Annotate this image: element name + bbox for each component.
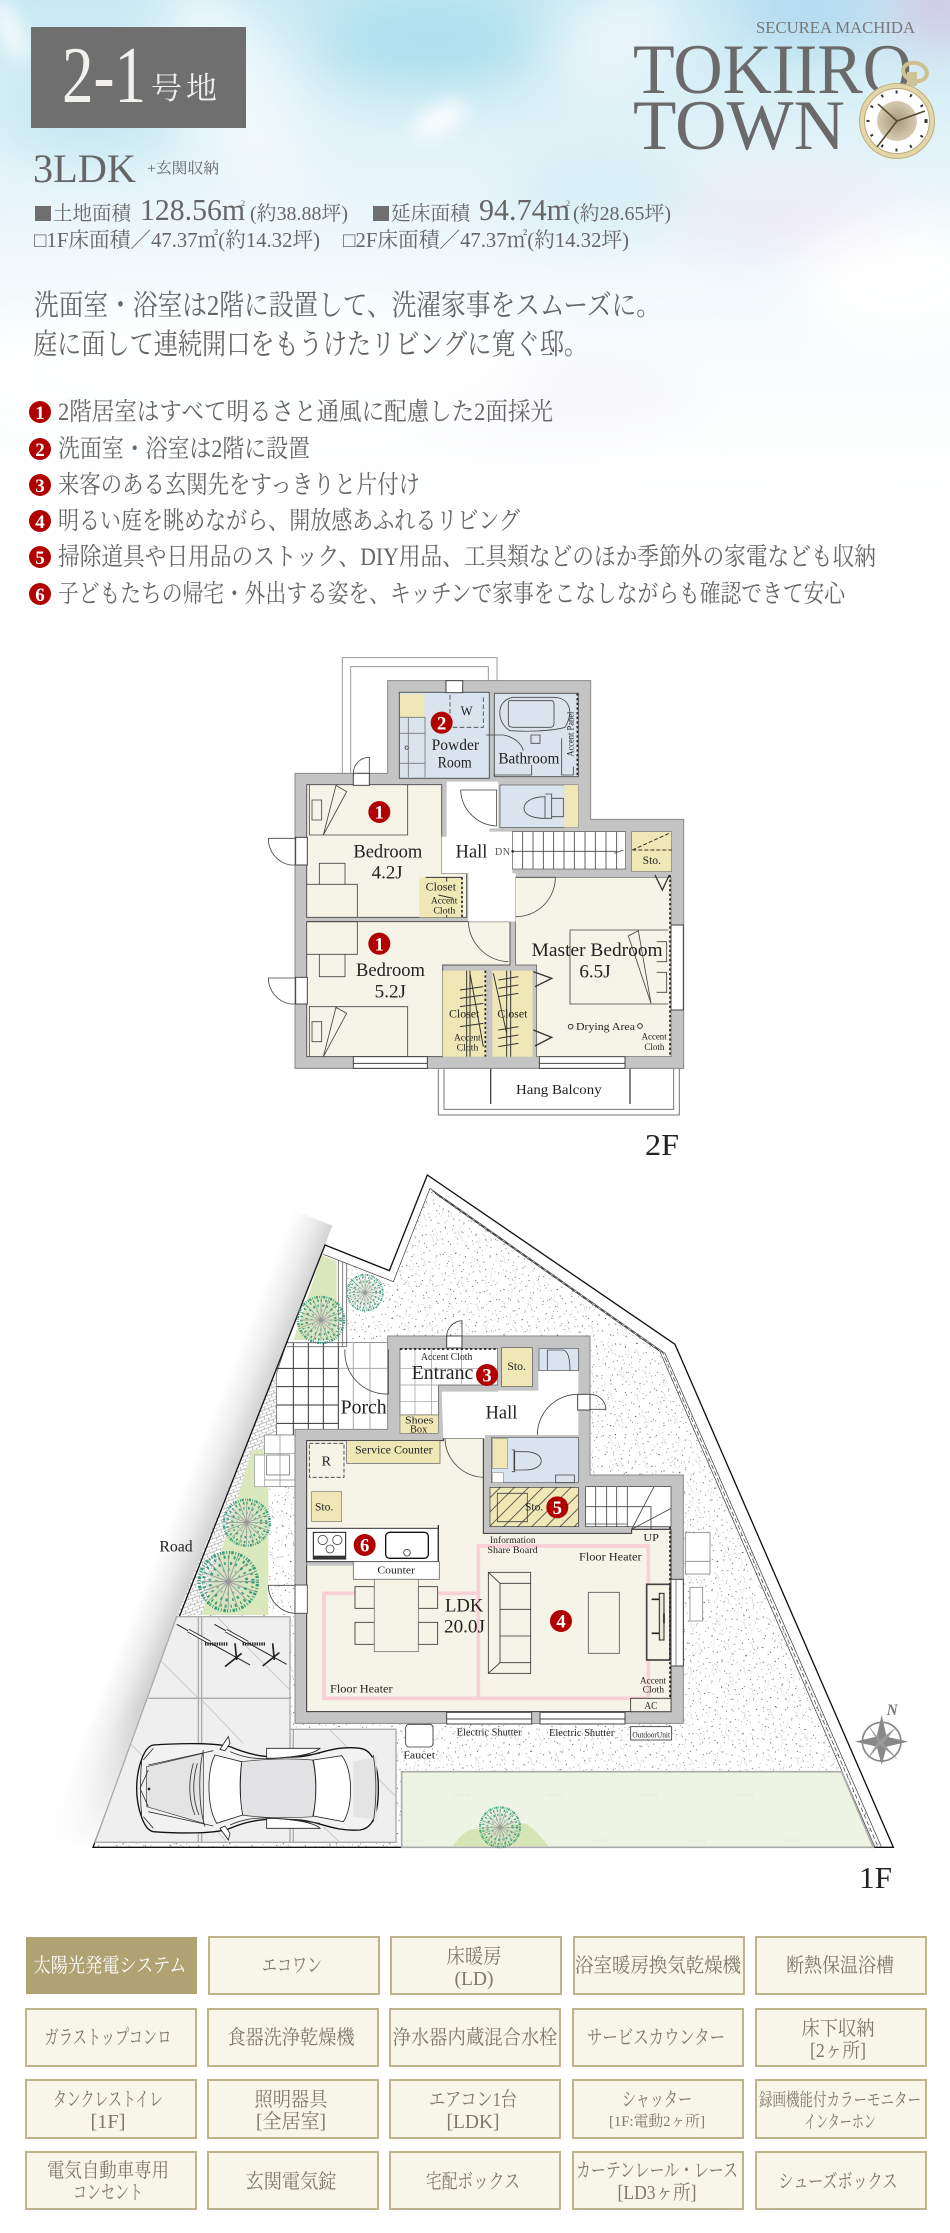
room labels: W — [461, 705, 473, 720]
stairs — [495, 832, 623, 869]
toilet fixtures — [497, 1350, 574, 1522]
windows and doors — [268, 681, 683, 1068]
room labels: Accent — [642, 1031, 667, 1041]
closets: Accent — [454, 1034, 481, 1044]
row 2: 浄水器内蔵混合水栓 — [392, 2026, 558, 2049]
row 3: [1F:電動2ヶ所] — [609, 2113, 705, 2130]
room floors — [307, 1348, 671, 1712]
room labels: Cloth — [643, 1686, 664, 1696]
area specifications: 土地面積 — [53, 202, 133, 225]
bath fixtures — [400, 695, 573, 818]
row 1: 断熱保温浴槽 — [786, 1954, 894, 1977]
icon: pocket watch — [860, 60, 934, 159]
marker 1: 1 — [375, 803, 384, 824]
planter divider — [287, 1260, 347, 1347]
room labels: Sto. — [643, 855, 661, 867]
gravel ground — [95, 1188, 882, 1847]
exterior units — [406, 1533, 710, 1747]
room labels: Accent Panel — [566, 711, 576, 757]
closets — [426, 693, 670, 1057]
room labels — [353, 705, 667, 1052]
area specifications: (約38.88坪) — [250, 202, 348, 225]
terrace outline — [342, 658, 497, 773]
row 4: コンセント — [73, 2182, 143, 2204]
icon: compass — [855, 1702, 908, 1765]
floor plan: 1F — [20, 1175, 908, 1850]
row 4: カーテンレール・レース — [576, 2160, 738, 2182]
site boundary — [93, 1175, 893, 1847]
room labels: Drying Area — [576, 1022, 635, 1033]
carport paving — [95, 1617, 396, 1842]
marker 5 — [546, 1496, 568, 1519]
feature list: 2 — [35, 440, 45, 461]
heading: plan type: 3LDK — [33, 146, 136, 191]
room labels: Bedroom — [353, 841, 422, 862]
room labels: Entranc — [412, 1362, 473, 1384]
row 3: シャッター — [622, 2089, 692, 2111]
room labels: Bathroom — [498, 750, 559, 767]
room labels: Information — [490, 1535, 536, 1546]
hang balcony: Hang Balcony — [516, 1082, 602, 1097]
area specifications — [34, 192, 671, 252]
room labels: Bedroom — [356, 960, 425, 981]
room labels: 20.0J — [444, 1617, 485, 1638]
room labels: Porch — [341, 1396, 387, 1418]
feature list: 5 — [35, 548, 45, 569]
row 4: [LD3ヶ所] — [618, 2181, 696, 2204]
feature list: 洗面室・浴室は2階に設置 — [58, 435, 310, 463]
row 2: 食器洗浄乾燥機 — [228, 2026, 355, 2049]
closets: Cloth — [433, 906, 456, 916]
row 1: (LD) — [454, 1968, 494, 1990]
room labels: AC — [644, 1701, 658, 1712]
row 3: インターホン — [804, 2112, 876, 2132]
marker 1 — [368, 801, 390, 824]
marker 5: 5 — [553, 1498, 562, 1519]
wall units: windows and doors — [268, 1321, 683, 1724]
logo: TOKIIRO TOWN: TOKIIRO — [633, 31, 912, 109]
area specifications: □1F床面積／47.37㎡(約14.32坪) — [34, 228, 320, 252]
marker 1 second bedroom — [368, 933, 390, 955]
area specifications: 2 — [241, 199, 245, 208]
marker 3 — [476, 1364, 498, 1387]
lawn — [402, 1772, 873, 1847]
floor plan: 2F — [268, 658, 684, 1115]
closets: Closet — [497, 1009, 528, 1021]
area specifications: (約28.65坪) — [573, 202, 671, 225]
marker 6 — [354, 1534, 376, 1557]
TV unit — [647, 1584, 670, 1660]
stairs: DN — [495, 847, 510, 858]
sofa and table — [488, 1572, 619, 1673]
furniture — [307, 785, 668, 1057]
room labels: Road — [159, 1539, 193, 1556]
closets: Accent — [431, 896, 458, 906]
room labels: Room — [438, 754, 472, 771]
row 3: [1F] — [90, 2111, 126, 2133]
room floors — [307, 692, 672, 1057]
car — [137, 1737, 378, 1840]
room labels: Powder — [432, 737, 479, 754]
row 4 — [26, 2152, 926, 2209]
hang balcony — [438, 1068, 679, 1115]
brick edging — [177, 1373, 277, 1615]
row 2 — [26, 2009, 926, 2066]
room labels: Faucet — [403, 1750, 435, 1761]
room labels: Sto. — [507, 1361, 526, 1373]
room labels: Accent Cloth — [421, 1352, 472, 1363]
row 2: 床下収納 — [802, 2017, 874, 2040]
room labels: Electric Shutter — [549, 1728, 615, 1739]
lead copy — [33, 289, 661, 361]
lead copy: 庭に面して連続開口をもうけたリビングに寛ぐ邸。 — [33, 328, 588, 361]
porch tiles — [255, 1343, 388, 1487]
area specifications: 2 — [566, 199, 570, 208]
area specifications: 94.74m — [479, 192, 570, 227]
heading: plan type: +玄関収納 — [147, 159, 219, 177]
lot number badge: 2-1 — [62, 32, 146, 120]
road shadow — [20, 1210, 332, 1847]
closets: Closet — [426, 882, 457, 894]
room labels: Sto. — [315, 1502, 333, 1514]
marker 3: 3 — [482, 1366, 492, 1387]
row 1: 床暖房 — [446, 1945, 502, 1968]
room labels: Floor Heater — [330, 1683, 393, 1695]
logo: TOKIIRO TOWN: SECUREA MACHIDA — [756, 18, 916, 37]
feature list: 6 — [35, 585, 45, 606]
planted strips — [202, 1255, 337, 1615]
room labels: Accent — [640, 1676, 666, 1686]
walls — [295, 681, 684, 1068]
feature list: 来客のある玄関先をすっきりと片付け — [58, 471, 420, 499]
room labels: Cloth — [644, 1042, 665, 1052]
closets: Closet — [449, 1009, 480, 1021]
lead copy: 洗面室・浴室は2階に設置して、洗濯家事をスムーズに。 — [34, 289, 661, 322]
row 3: [全居室] — [256, 2110, 326, 2133]
marker 4 — [550, 1610, 572, 1633]
kitchen — [307, 1525, 439, 1579]
room labels: Share Board — [487, 1546, 538, 1556]
feature list: 2階居室はすべて明るさと通風に配慮した2面採光 — [58, 398, 553, 426]
room labels: Hall — [486, 1402, 517, 1423]
row 1: エコワン — [262, 1955, 322, 1977]
floor label 1F: 1F — [859, 1860, 892, 1895]
room labels: Hall — [456, 841, 487, 862]
marker 2 — [431, 712, 453, 734]
marker 6: 6 — [360, 1536, 369, 1557]
logo: TOKIIRO TOWN: TOWN — [633, 87, 845, 165]
room labels: UP — [643, 1533, 659, 1544]
room labels: 5.2J — [375, 981, 406, 1002]
room labels: R — [322, 1455, 332, 1470]
lot number badge — [31, 27, 246, 128]
feature list: 1 — [35, 403, 45, 424]
room labels: Box — [410, 1424, 427, 1435]
room labels: Sto. — [525, 1502, 543, 1514]
room labels: 4.2J — [372, 863, 403, 884]
building walls — [295, 1336, 683, 1723]
marker 4: 4 — [556, 1612, 566, 1633]
room labels: Electric Shutter — [457, 1728, 522, 1739]
room labels: OutdoorUnit — [632, 1729, 670, 1739]
marker 2: 2 — [437, 713, 446, 734]
lot number badge: 号地 — [151, 71, 217, 106]
logo: TOKIIRO TOWN — [633, 18, 934, 165]
row 4: 宅配ボックス — [426, 2170, 520, 2193]
equipment grid — [26, 1937, 926, 2209]
feature list: 明るい庭を眺めながら、開放感あふれるリビング — [58, 507, 520, 535]
row 3: タンクレストイレ — [53, 2089, 163, 2111]
room labels — [159, 1352, 670, 1761]
room labels: Shoes — [405, 1415, 433, 1426]
feature list — [29, 398, 876, 608]
floor heater zones — [324, 1546, 648, 1698]
accent cloth edges — [400, 1349, 670, 1712]
room labels: Counter — [377, 1565, 415, 1576]
row 3: エアコン1台 — [429, 2088, 517, 2111]
row 4: シューズボックス — [778, 2170, 898, 2193]
heading: plan type — [33, 146, 219, 191]
row 2: [2ヶ所] — [810, 2039, 866, 2062]
floor label 2F: 2F — [645, 1127, 679, 1162]
row 3: [LDK] — [446, 2111, 500, 2133]
trees — [199, 1275, 383, 1611]
closets: Cloth — [457, 1044, 479, 1054]
row 2: サービスカウンター — [587, 2027, 725, 2049]
room labels: 6.5J — [579, 961, 611, 982]
room labels: Service Counter — [355, 1442, 433, 1456]
row 1 — [26, 1937, 926, 1994]
row 3 — [26, 2080, 926, 2138]
road shadow fade — [20, 1710, 153, 1850]
room labels: Master Bedroom — [532, 940, 663, 961]
marker 1 second bedroom: 1 — [375, 934, 384, 955]
dining set — [355, 1579, 438, 1652]
room labels: Floor Heater — [579, 1552, 642, 1564]
area specifications: 128.56m — [140, 192, 245, 227]
row 4: 玄関電気錠 — [246, 2170, 336, 2193]
row 4: 電気自動車専用 — [47, 2159, 169, 2182]
bicycles — [177, 1624, 287, 1667]
icon: compass: N — [886, 1702, 899, 1719]
row 3: 照明器具 — [254, 2088, 328, 2111]
feature list: 3 — [35, 476, 45, 497]
feature list: 4 — [35, 512, 45, 533]
row 1: 太陽光発電システム — [34, 1954, 186, 1977]
row 1: 浴室暖房換気乾燥機 — [575, 1954, 742, 1977]
area specifications: □2F床面積／47.37㎡(約14.32坪) — [343, 228, 629, 252]
room labels: LDK — [445, 1596, 483, 1617]
area specifications: 延床面積 — [391, 202, 472, 225]
stairs — [586, 1487, 671, 1529]
row 2: ガラストップコンロ — [44, 2026, 172, 2049]
